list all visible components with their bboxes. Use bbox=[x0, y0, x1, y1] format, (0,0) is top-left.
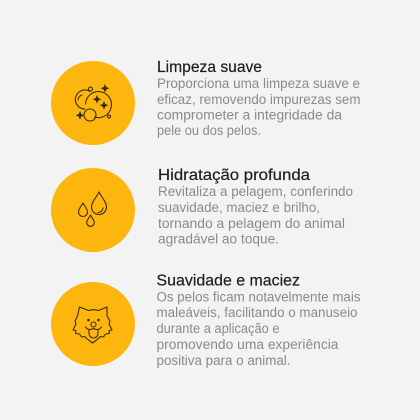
icon circle: bubbles bbox=[51, 61, 135, 145]
text block: Hidratação profunda description bbox=[158, 184, 353, 246]
text block: Limpeza suave description: pele ou dos pelos. bbox=[157, 123, 261, 138]
text block: Hidratação profunda description: agradável ao toque. bbox=[158, 232, 279, 246]
text block: Suavidade e maciez description: maleáveis, facilitando o manuseio bbox=[156, 305, 358, 320]
text block: Limpeza suave description: comprometer a integridade da bbox=[157, 108, 342, 122]
heading: Suavidade e maciez: Suavidade e maciez bbox=[156, 272, 300, 290]
panel: Limpeza suave bbox=[51, 59, 360, 145]
text block: Suavidade e maciez description bbox=[156, 290, 361, 368]
icon circle: water drops bbox=[51, 168, 135, 252]
text block: Hidratação profunda description: suavidade, maciez e brilho, bbox=[158, 200, 320, 215]
text block: Hidratação profunda description: tornando a pelagem do animal bbox=[158, 216, 345, 231]
icon circle: dog face bbox=[51, 282, 135, 366]
text block: Limpeza suave description bbox=[157, 76, 360, 138]
text block: Suavidade e maciez description: durante a aplicação e bbox=[156, 321, 280, 336]
text block: Suavidade e maciez description: promovendo uma experiência bbox=[156, 337, 339, 352]
text block: Suavidade e maciez description: positiva para o animal. bbox=[156, 353, 290, 368]
text block: Hidratação profunda description: Revitaliza a pelagem, conferindo bbox=[158, 184, 353, 199]
text block: Limpeza suave description: eficaz, removendo impurezas sem bbox=[157, 92, 360, 107]
panel: Suavidade e maciez bbox=[51, 272, 361, 368]
panel: Hidratação profunda bbox=[51, 167, 353, 252]
heading: Hidratação profunda: Hidratação profunda bbox=[158, 167, 310, 184]
text block: Suavidade e maciez description: Os pelos ficam notavelmente mais bbox=[156, 290, 361, 304]
heading: Limpeza suave: Limpeza suave bbox=[157, 59, 262, 76]
text block: Limpeza suave description: Proporciona uma limpeza suave e bbox=[157, 76, 360, 91]
